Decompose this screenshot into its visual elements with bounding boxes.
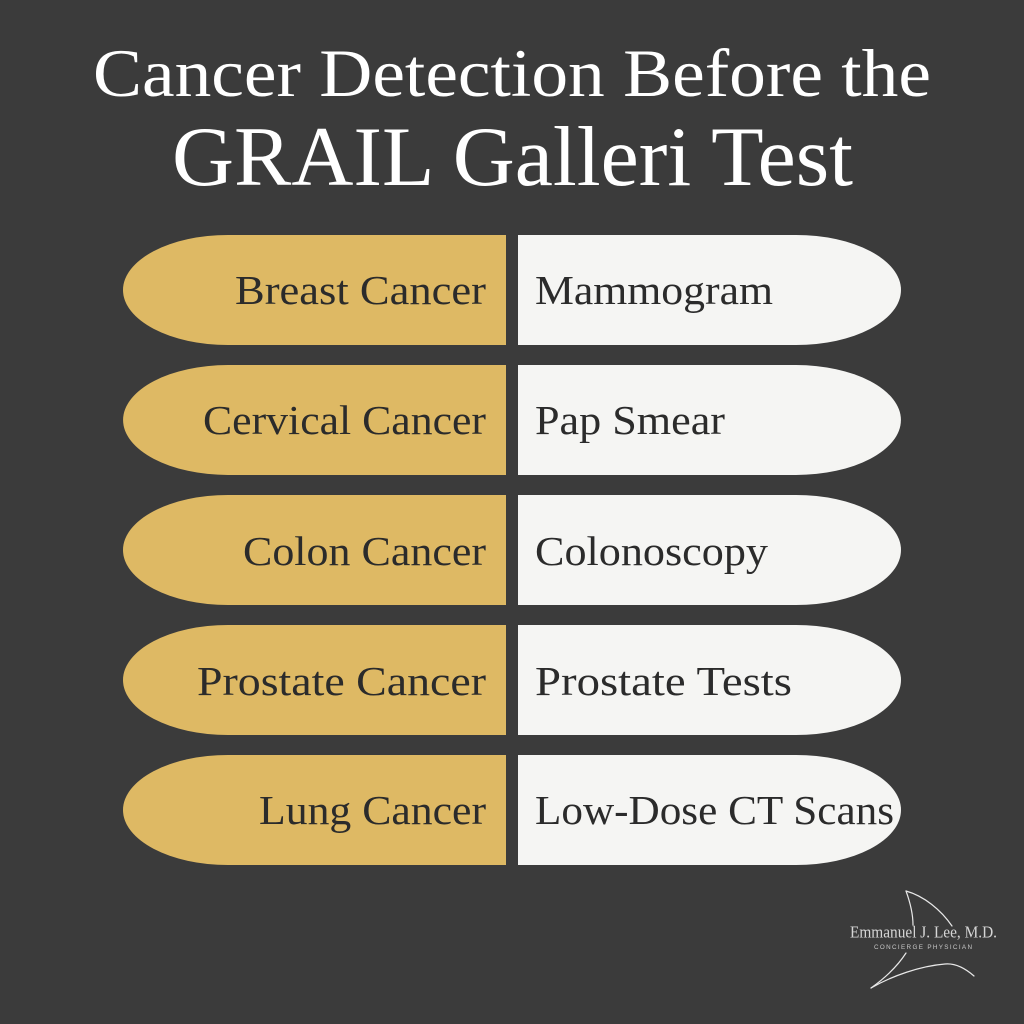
cancer type: colon cancer: Colon Cancer	[243, 528, 486, 574]
screening test: colonoscopy: Colonoscopy	[535, 528, 769, 574]
row: colon cancer	[123, 495, 901, 605]
screening test: mammogram	[518, 235, 901, 345]
screening test: pap smear: Pap Smear	[535, 397, 725, 443]
cancer type: breast cancer	[123, 235, 506, 345]
icon: sail mark	[871, 891, 974, 988]
cancer type: prostate cancer	[123, 625, 506, 735]
cancer type: lung cancer	[123, 755, 506, 865]
row: cervical cancer	[123, 365, 901, 475]
title	[93, 35, 931, 204]
cancer type: prostate cancer: Prostate Cancer	[197, 658, 486, 704]
cancer type: breast cancer: Breast Cancer	[235, 267, 486, 313]
screening test: low-dose ct scans: Low-Dose CT Scans	[535, 787, 894, 833]
title: Cancer Detection Before the	[93, 35, 931, 111]
row: prostate cancer	[123, 625, 901, 735]
screening test: pap smear	[518, 365, 901, 475]
screening test: colonoscopy	[518, 495, 901, 605]
cancer type: lung cancer: Lung Cancer	[259, 787, 486, 833]
logo: Emmanuel J. Lee, M.D.: Emmanuel J. Lee, M.D.	[850, 922, 997, 942]
title: GRAIL Galleri Test	[172, 110, 853, 204]
row: breast cancer	[123, 235, 901, 345]
screening test: prostate tests	[518, 625, 901, 735]
row: lung cancer	[123, 755, 901, 865]
cancer type: cervical cancer: Cervical Cancer	[203, 397, 486, 443]
screening test: prostate tests: Prostate Tests	[535, 658, 792, 704]
cancer type: cervical cancer	[123, 365, 506, 475]
cancer type: colon cancer	[123, 495, 506, 605]
screening test: mammogram: Mammogram	[535, 267, 773, 313]
logo: Emmanuel J. Lee, M.D.: CONCIERGE PHYSICIAN	[874, 944, 972, 951]
logo: Emmanuel J. Lee, M.D.	[850, 891, 997, 988]
screening test: low-dose ct scans	[518, 755, 901, 865]
